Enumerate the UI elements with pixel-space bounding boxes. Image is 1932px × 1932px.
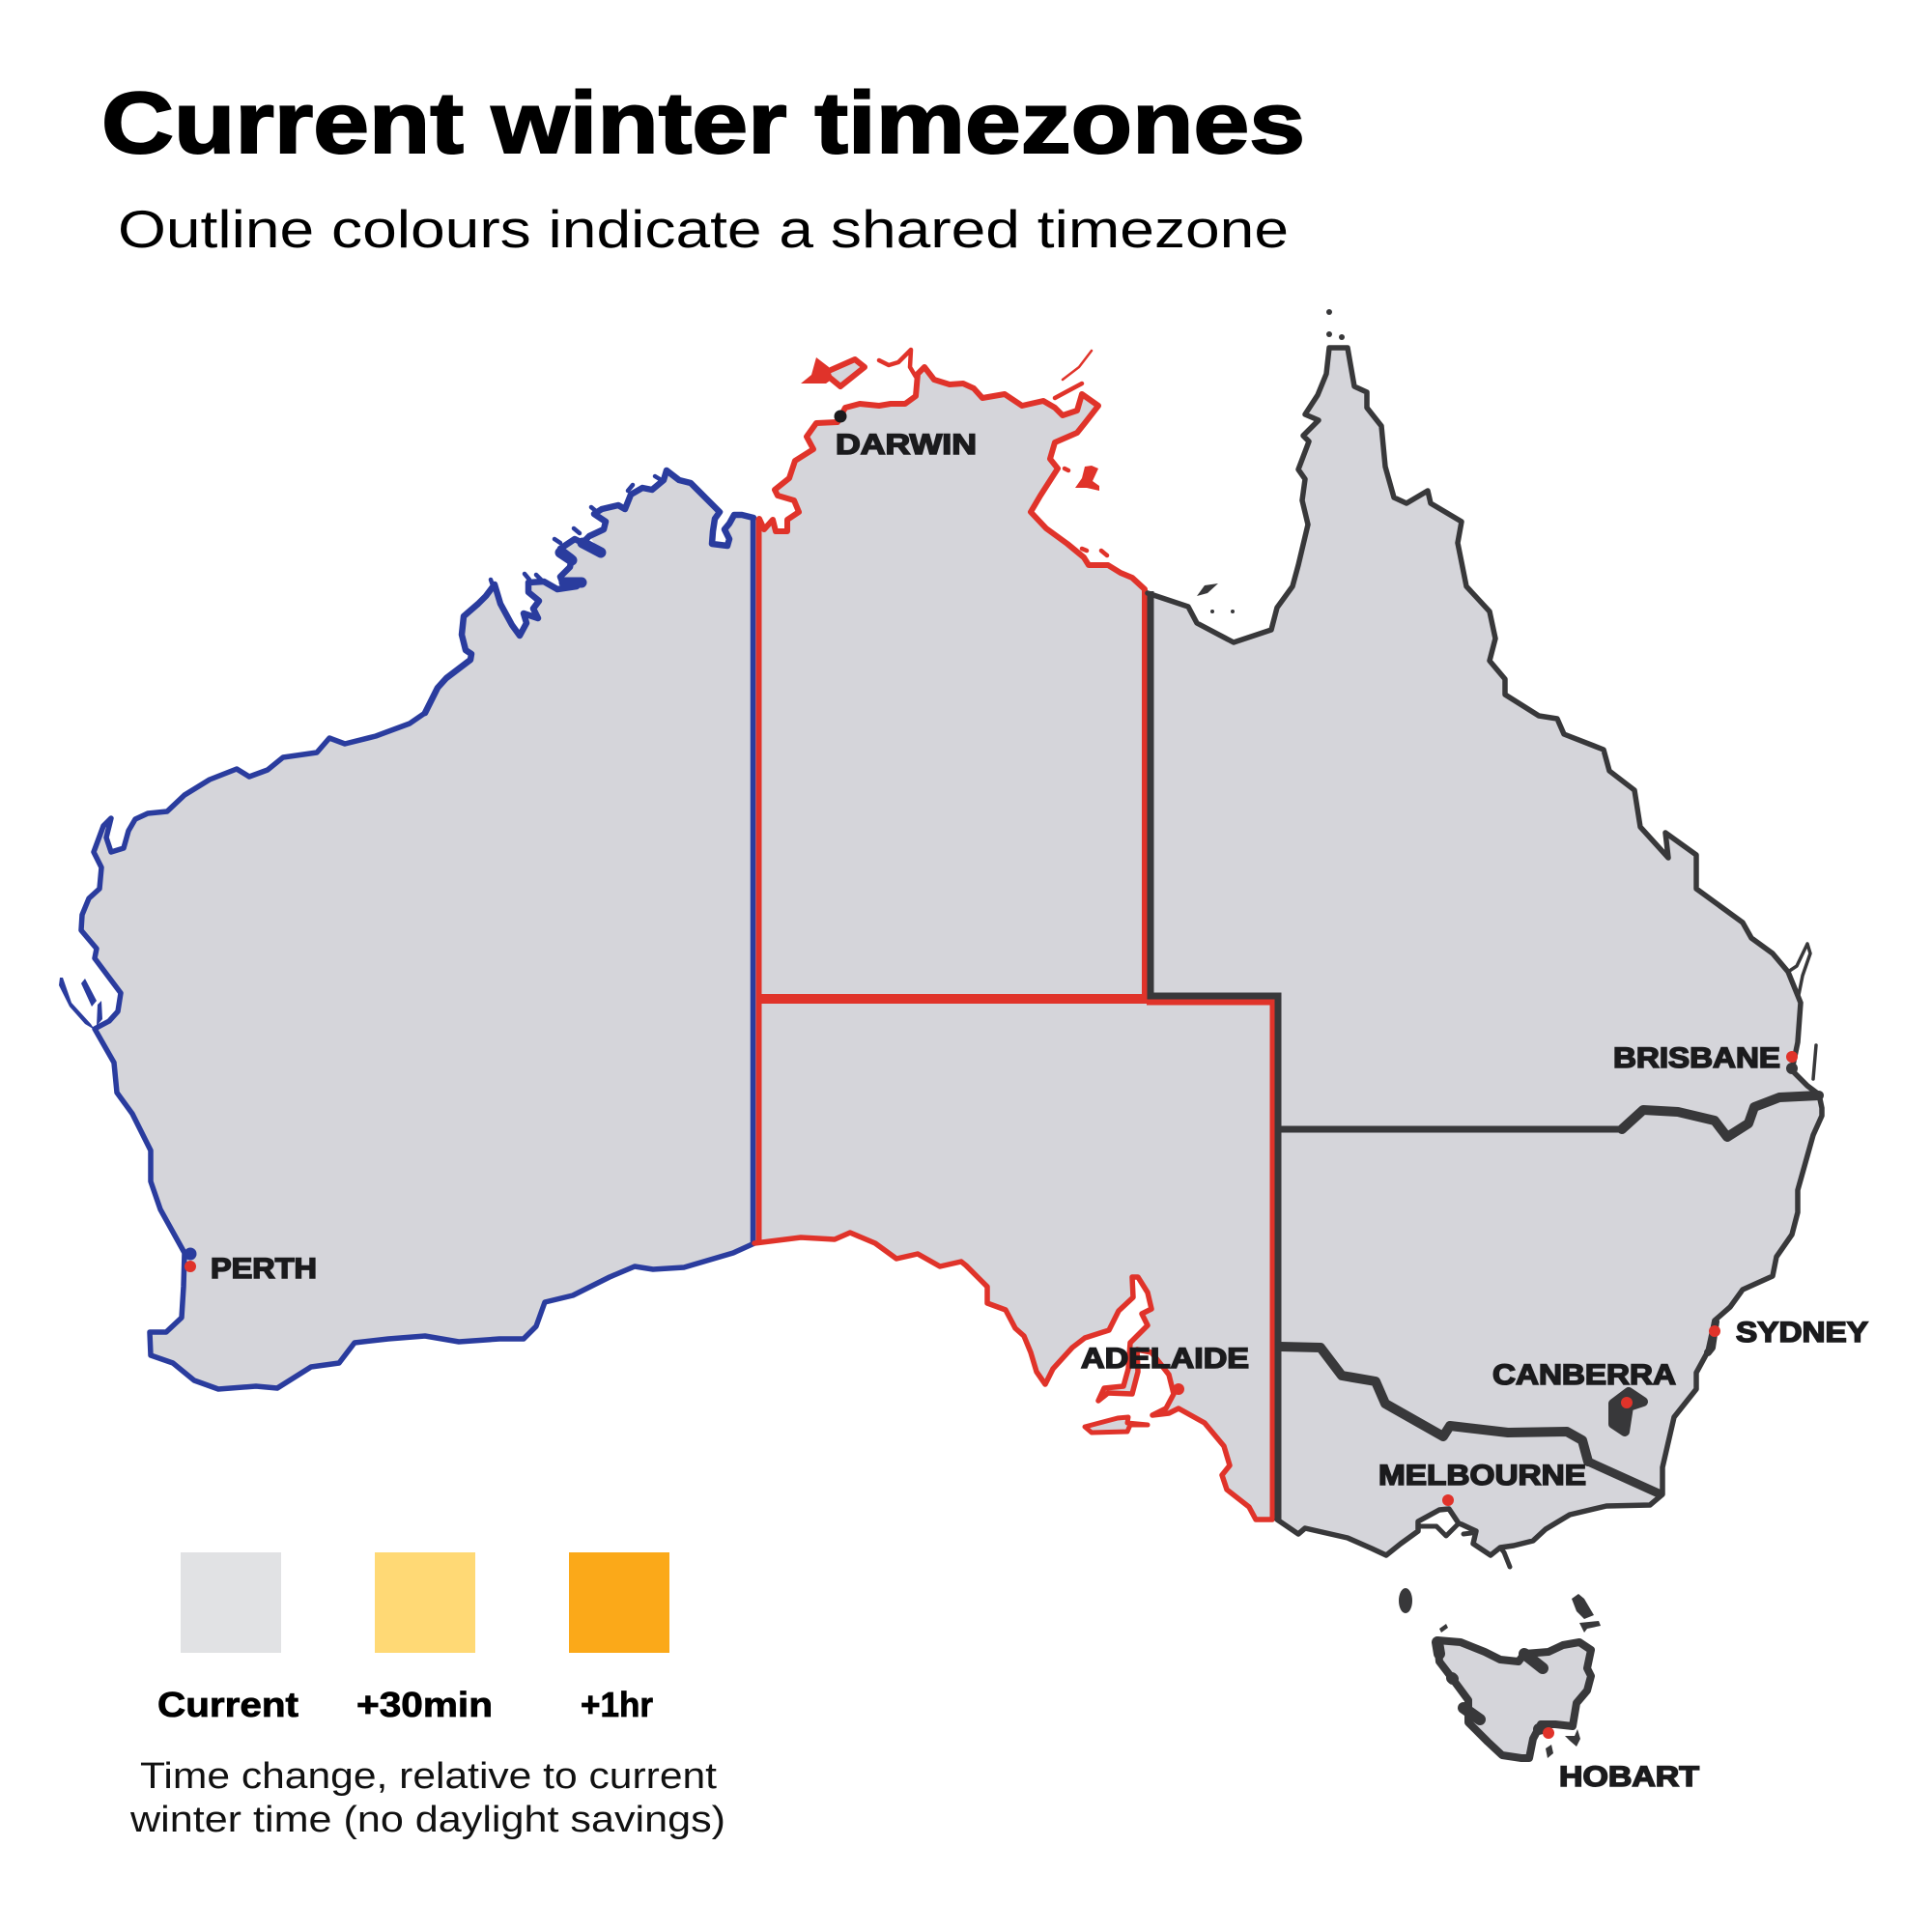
- dark outline: Murray river border: [1280, 1347, 1588, 1462]
- dark outline: Queensland and NSW river border: [1622, 1095, 1819, 1137]
- city labels: [211, 429, 1868, 1793]
- dark outline: Port Phillip, Wilsons Prom and Sydney coast detail: [1418, 1523, 1510, 1567]
- legend label: current: Current: [157, 1685, 298, 1724]
- legend caption line 2: winter time (no daylight savings): [129, 1800, 725, 1840]
- red outline: Kangaroo Island: [1085, 1417, 1148, 1433]
- city labels: BRISBANE: [1613, 1042, 1780, 1074]
- legend: [129, 1552, 725, 1840]
- red fragments: Arnhem Land and Gulf islands: [879, 350, 1107, 555]
- city labels: ADELAIDE: [1081, 1343, 1249, 1375]
- city labels: CANBERRA: [1492, 1359, 1676, 1391]
- city labels: DARWIN: [836, 429, 977, 461]
- red outline: South Australia and Northern Territory coast: [754, 1233, 1272, 1520]
- dark outline: Fraser Island and Moreton: [1788, 944, 1816, 1079]
- dark outline: Queensland and state borders: [1151, 591, 1622, 1520]
- dark outline: Tasmania: [1437, 1640, 1591, 1758]
- city labels: PERTH: [211, 1253, 317, 1285]
- mainland fill: [81, 348, 1822, 1555]
- red outline: Tiwi Islands: [824, 359, 865, 386]
- dark outline: NSW and Victoria straight border: [1588, 1462, 1659, 1493]
- legend label: +1hr: +1hr: [581, 1685, 653, 1724]
- blue outline: WA border: [751, 518, 755, 1243]
- city labels: SYDNEY: [1736, 1317, 1868, 1349]
- blue outline: Western Australia coast: [81, 713, 754, 1389]
- Tasmania fill: [1437, 1640, 1591, 1758]
- dark thick harbours of Tasmania: [1437, 1642, 1546, 1729]
- dark islands: Bass Strait, Torres Strait, Gulf: [1197, 309, 1601, 1758]
- subtitle: Outline colours indicate a shared timezone: [118, 199, 1289, 259]
- legend swatch: current: [181, 1552, 281, 1653]
- blue outline: Shark Bay islands: [59, 978, 102, 1030]
- city markers: [184, 410, 1798, 1739]
- city labels: HOBART: [1559, 1761, 1699, 1793]
- red outline: timezone borders: [759, 518, 1273, 1520]
- map of Australia: [59, 309, 1822, 1758]
- dark outline: ACT: [1613, 1392, 1643, 1432]
- legend swatch: +1hr: [569, 1552, 669, 1653]
- legend swatch: +30min: [375, 1552, 475, 1653]
- blue outline: Kimberley coast: [425, 470, 753, 713]
- dark outline: eastern states coast: [1148, 348, 1822, 1555]
- blue thick inlets: [560, 543, 601, 582]
- title: Current winter timezones: [101, 75, 1305, 172]
- city labels: MELBOURNE: [1378, 1460, 1586, 1492]
- legend label: +30min: +30min: [356, 1685, 493, 1724]
- legend caption line 1: Time change, relative to current: [140, 1756, 717, 1797]
- blue fragments: Kimberley islands: [491, 476, 660, 585]
